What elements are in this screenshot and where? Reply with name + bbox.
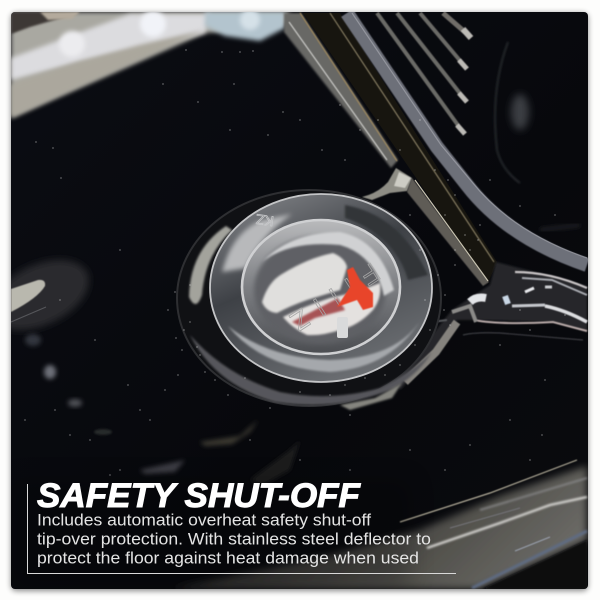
caption block: [28, 477, 456, 574]
dim gradient behind caption: [110, 474, 417, 586]
clear ring: [210, 194, 432, 382]
lower trim strip and connector: [362, 168, 489, 286]
dust speckles: [25, 50, 565, 475]
caption frame: [28, 484, 456, 574]
chrome reflections bottom right: [170, 460, 587, 589]
chrome junction arm: [395, 262, 587, 390]
steel deflector band: [347, 13, 587, 265]
safety shut-off sensor dial: [177, 190, 441, 410]
description: [37, 510, 431, 568]
blurred reflection top left: [11, 10, 290, 118]
red tip-over indicator: [337, 267, 373, 310]
description: protect the floor against heat damage when used: [37, 548, 419, 568]
embossed label lettering: FIIIZ: [285, 257, 385, 337]
embossed KZ mark: KZ: [254, 211, 275, 230]
vent slots: [377, 13, 471, 134]
heading: SAFETY SHUT-OFF: [37, 477, 361, 515]
outer dark collar: [177, 190, 441, 406]
left side reflections: [0, 246, 300, 486]
faint dark reflection right: [495, 42, 580, 230]
white indicator label: [262, 253, 347, 313]
inner well: [242, 220, 400, 354]
description: tip-over protection. With stainless steel deflector to: [37, 530, 431, 548]
description: Includes automatic overheat safety shut-off: [37, 510, 371, 530]
diagonal trim strip: [284, 13, 497, 283]
white tab: [337, 317, 348, 338]
